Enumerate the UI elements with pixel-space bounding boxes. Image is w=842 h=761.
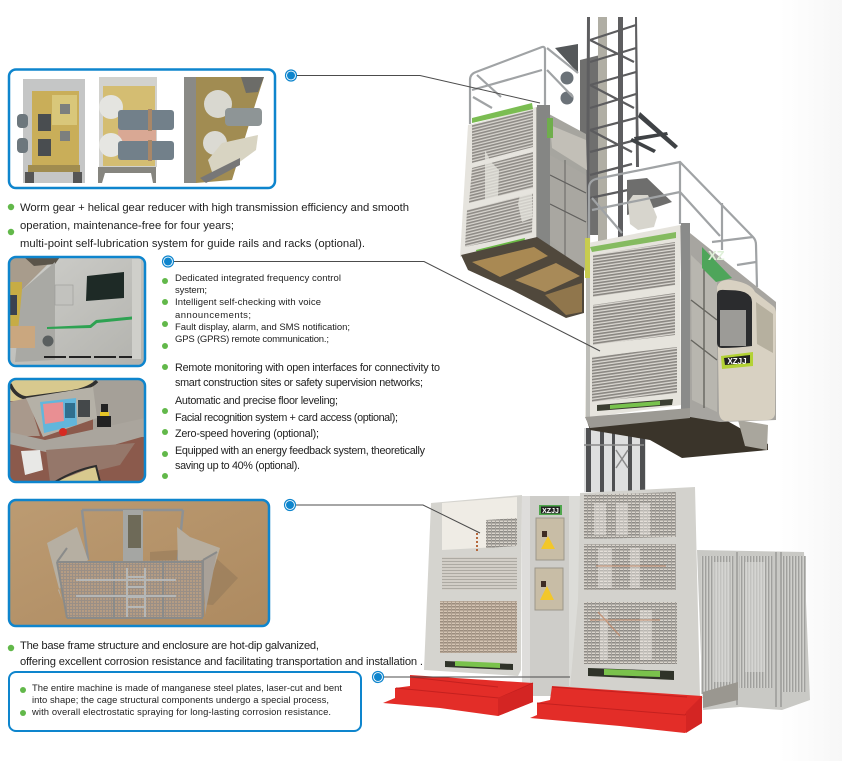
lower cage floor [586,412,768,458]
text block: monitoring and options [162,362,440,479]
panel: base frame photo [9,500,269,626]
upper cage front [460,107,536,257]
base label: XZJJ [539,505,562,515]
upper cage [460,47,588,318]
panel: material callout: into shape; the cage structural components undergo a special process, [32,694,329,705]
lower mast [584,428,646,492]
panel: operator console photo [9,379,145,482]
lower cage front [585,225,681,418]
base enclosure [424,487,810,710]
panel: gear reducer photos [9,70,275,188]
background fade at right edge [780,0,842,761]
red steps right [530,686,702,733]
text block: monitoring and options: smart construction sites or safety supervision networks; [175,377,423,389]
text block: monitoring and options: Equipped with an energy feedback system, theoretically [175,445,426,457]
lower cage guard rail [589,162,757,287]
upper cage side [536,107,588,272]
panel: material callout [9,672,361,731]
text block: control system features [162,273,350,349]
text block: control system features: GPS (GPRS) remote communication.; [175,334,329,345]
callout marker and leader: reducer [286,70,540,103]
photo: reducer installed [184,77,264,183]
lower cage [585,162,776,458]
lower cage label: XZJJ: XZJJ [727,357,747,366]
text block: control system features: system; [175,285,207,296]
far right side cage [697,550,810,710]
hoist illustration [383,17,810,733]
text block: base frame description: The base frame structure and enclosure are hot-dip galvanized, [20,640,319,652]
panel: control cabinet photo [9,257,145,366]
panel: material callout: with overall electrostatic spraying for long-lasting corrosion resistance. [31,706,331,717]
base label: XZJJ: XZJJ [542,508,559,515]
lower cage side [680,225,776,422]
callout marker and leader: control system [162,256,600,351]
text block: control system features: announcements; [175,310,251,321]
lower cage operator cab [717,280,776,421]
upper cage floor [461,237,584,318]
electrical box upper [536,518,564,560]
text block: monitoring and options: Automatic and precise floor leveling; [175,395,338,407]
text block: reducer description [8,202,409,250]
text block: base frame description: offering excellent corrosion resistance and facilitating transportation and installation . [20,656,423,668]
upper mast tower [555,17,678,257]
text block: monitoring and options: Remote monitoring with open interfaces for connectivity to [175,362,440,374]
photo: reducer rear [17,79,85,183]
text block: monitoring and options: Zero-speed hovering (optional); [175,428,319,440]
text block: base frame description [8,640,423,668]
text block: monitoring and options: Facial recognition system + card access (optional); [175,412,398,424]
base left gate [424,495,522,676]
base right gate [570,487,700,697]
upper cage guard rail [470,47,578,124]
text block: reducer description: multi-point self-lubrication system for guide rails and racks (optional). [20,238,365,250]
text block: reducer description: Worm gear + helical gear reducer with high transmission efficiency and smooth [20,202,409,214]
panel: material callout: The entire machine is made of manganese steel plates, laser-cut and bent [32,682,342,693]
text block: monitoring and options: saving up to 40% (optional). [175,460,300,472]
text block: control system features: Dedicated integrated frequency control [175,273,341,284]
callout marker and leader: material [372,672,570,682]
lower cage label: XZJJ [721,352,753,369]
electrical box lower [535,568,563,610]
text block: control system features: Intelligent self-checking with voice [175,297,321,308]
base center section [522,496,581,696]
XZ cage logo: XZ [708,248,725,263]
photo: reducer front [98,77,174,183]
red steps left [383,675,533,716]
callout marker and leader: base enclosure [284,500,480,533]
text block: control system features: Fault display, alarm, and SMS notification; [175,322,350,333]
text block: reducer description: operation, maintenance-free for four years; [20,220,234,232]
